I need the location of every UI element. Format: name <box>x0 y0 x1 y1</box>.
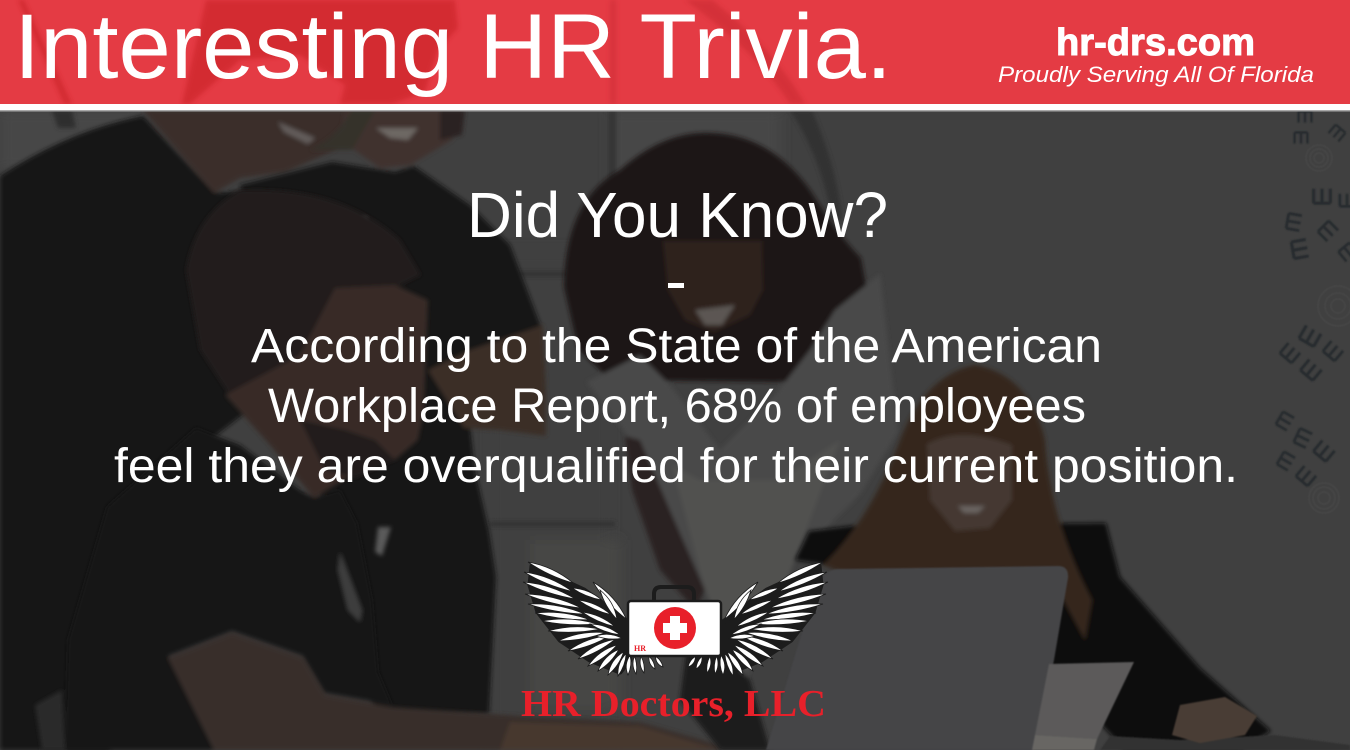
man standing behind: black shirt and face <box>240 110 546 714</box>
woman standing: afro hair, face, grey top <box>564 133 898 750</box>
logo: HR Doctors winged medical case <box>521 559 829 725</box>
icon: medical case: HR <box>634 644 646 653</box>
trivia statement: According to the State of the American <box>251 320 1102 373</box>
header banner: red band with faded photo <box>0 0 1350 112</box>
seated man: hair, face, black t-shirt <box>35 190 720 750</box>
icon: medical case <box>628 587 721 656</box>
logo wordmark: HR Doctors, LLC <box>521 683 826 725</box>
trivia statement: Workplace Report, 68% of employees <box>268 380 1086 433</box>
icon: left wing <box>522 559 664 677</box>
man standing left: black shirt <box>0 110 352 750</box>
woman seated: long hair, face, black blazer <box>795 365 1271 750</box>
eye chart wall art <box>1276 111 1350 486</box>
heading: Did You Know?: Did You Know? <box>467 179 888 251</box>
website address: hr-drs.com <box>1056 22 1255 64</box>
laptop <box>766 566 1068 750</box>
notebook and hand on the desk <box>1032 662 1350 750</box>
icon: right wing <box>687 559 829 677</box>
dash divider <box>668 283 684 288</box>
window panels behind team <box>0 110 780 750</box>
tagline: Proudly Serving All Of Florida <box>998 62 1314 87</box>
trivia statement: feel they are overqualified for their current position. <box>114 440 1238 493</box>
trivia statement <box>114 320 1238 493</box>
